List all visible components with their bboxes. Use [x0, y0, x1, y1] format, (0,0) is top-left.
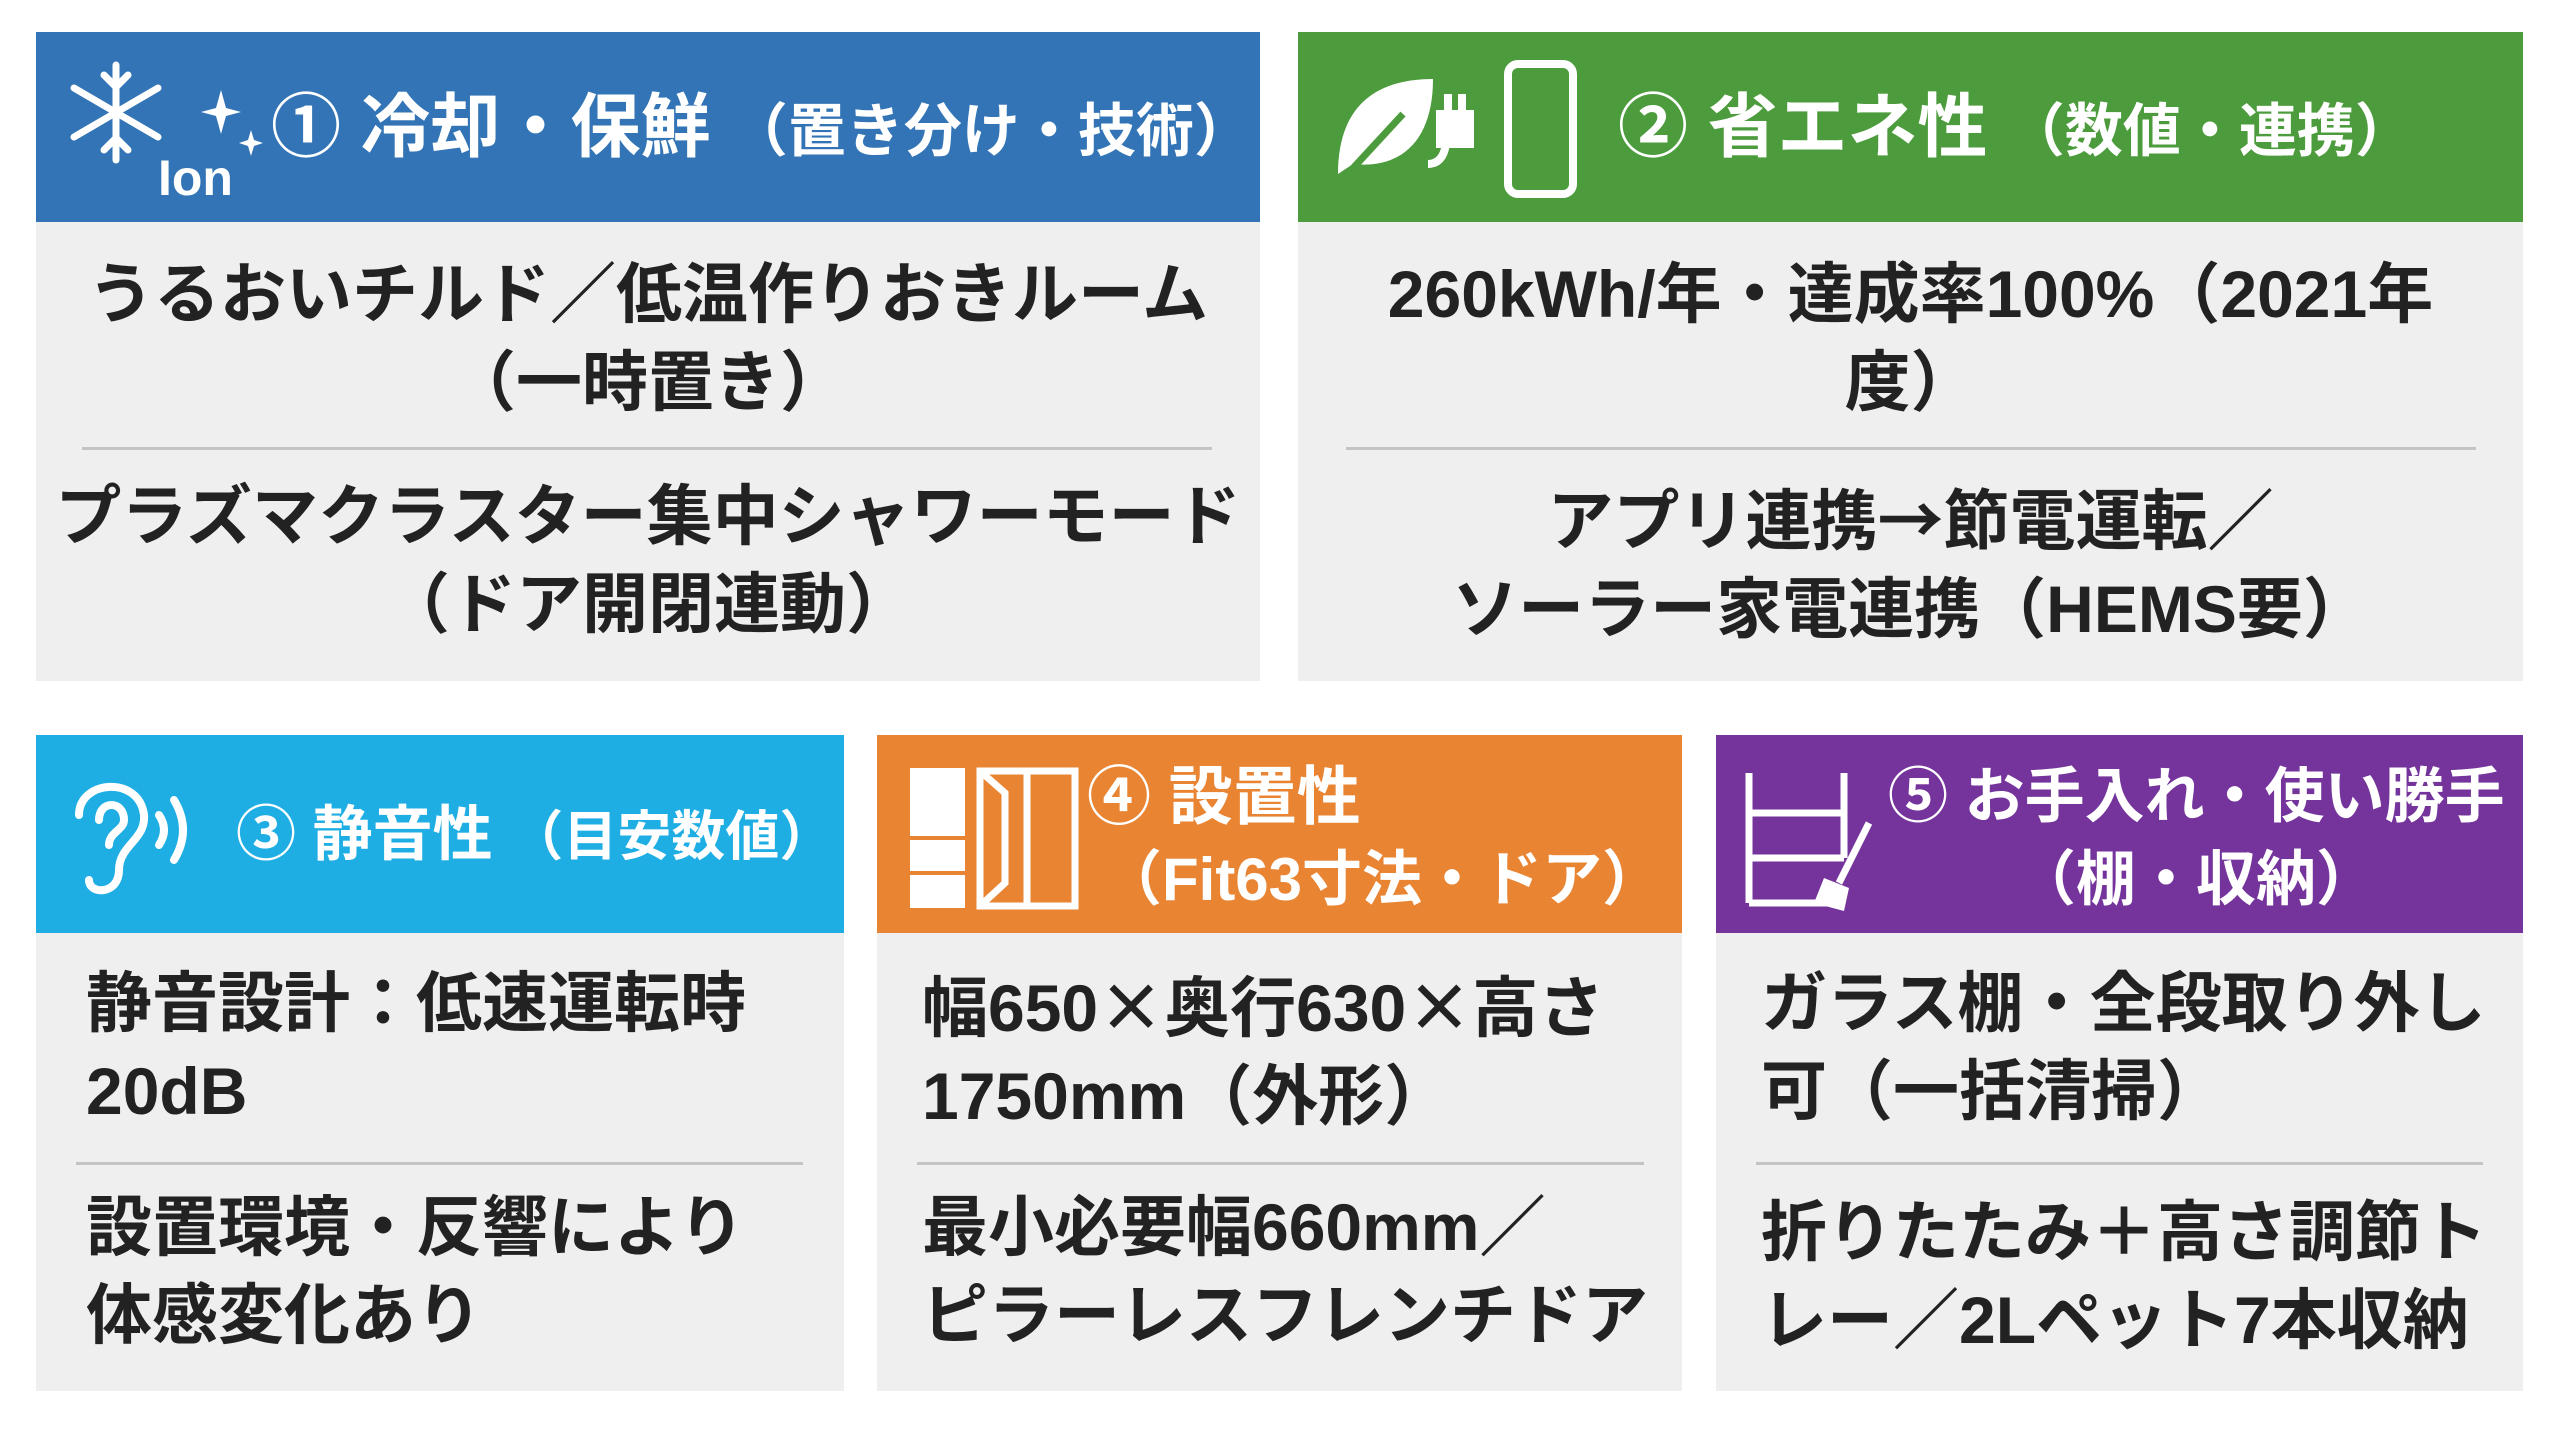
body text: （一時置き） — [450, 345, 846, 419]
body text: レー／2Lペット7本収納 — [1761, 1283, 2469, 1357]
body text: （ドア開閉連動） — [384, 567, 912, 641]
body text: 1750mm（外形） — [922, 1059, 1450, 1133]
header: installation: （Fit63寸法・ドア） — [1102, 846, 1662, 913]
body text: 260kWh/年・達成率100%（2021年 — [1388, 257, 2433, 331]
body text — [36, 933, 844, 1391]
panel: cooling — [36, 32, 1260, 681]
body text: 度） — [1844, 345, 1976, 419]
icon: fridge doors — [910, 768, 1078, 910]
body text: ガラス棚・全段取り外し — [1761, 966, 2486, 1040]
body text: 折りたたみ＋高さ調節ト — [1761, 1179, 2487, 1275]
body text: 幅650×奥行630×高さ — [922, 955, 1604, 1051]
header title: ④ 設置性 — [1087, 761, 1361, 833]
icon: leaf plug phone — [1338, 60, 1577, 198]
header: care — [1716, 735, 2523, 933]
body text — [877, 933, 1682, 1391]
body text: プラズマクラスター集中シャワーモード — [55, 479, 1241, 553]
header: cooling — [36, 32, 1260, 222]
header: quiet — [36, 735, 844, 933]
body text: 静音設計：低速運転時 — [86, 966, 746, 1040]
header: care: （棚・収納） — [2016, 846, 2376, 913]
header: energy — [1298, 32, 2523, 222]
panel: energy — [1298, 32, 2523, 681]
body text: ピラーレスフレンチドア — [922, 1278, 1648, 1352]
icon: snowflake ion — [70, 62, 263, 200]
body text: 20dB — [86, 1054, 247, 1128]
body text: ソーラー家電連携（HEMS要） — [1452, 572, 2369, 646]
panel: installation — [877, 735, 1682, 1391]
panel: quiet — [36, 735, 844, 1391]
body text — [1298, 222, 2523, 681]
header title: ② 省エネ性 （数値・連携） — [1618, 88, 2413, 166]
header: installation — [877, 735, 1682, 933]
body text — [36, 222, 1260, 681]
body text — [1716, 933, 2523, 1391]
body text: アプリ連携→節電運転／ — [1548, 468, 2274, 564]
icon: ear — [75, 782, 188, 894]
body text: 最小必要幅660mm／ — [922, 1190, 1546, 1264]
header title: ③ 静音性 （目安数値） — [236, 801, 833, 868]
panel: care — [1716, 735, 2523, 1391]
body text: 体感変化あり — [86, 1278, 482, 1352]
header title: ⑤ お手入れ・使い勝手 — [1888, 763, 2505, 830]
icon: shelf broom — [1746, 773, 1872, 911]
header title: ① 冷却・保鮮 （置き分け・技術） — [271, 88, 1252, 166]
body text: 可（一括清掃） — [1761, 1054, 2223, 1128]
body text: うるおいチルド／低温作りおきルーム — [88, 257, 1208, 331]
body text: 設置環境・反響により — [86, 1190, 745, 1264]
